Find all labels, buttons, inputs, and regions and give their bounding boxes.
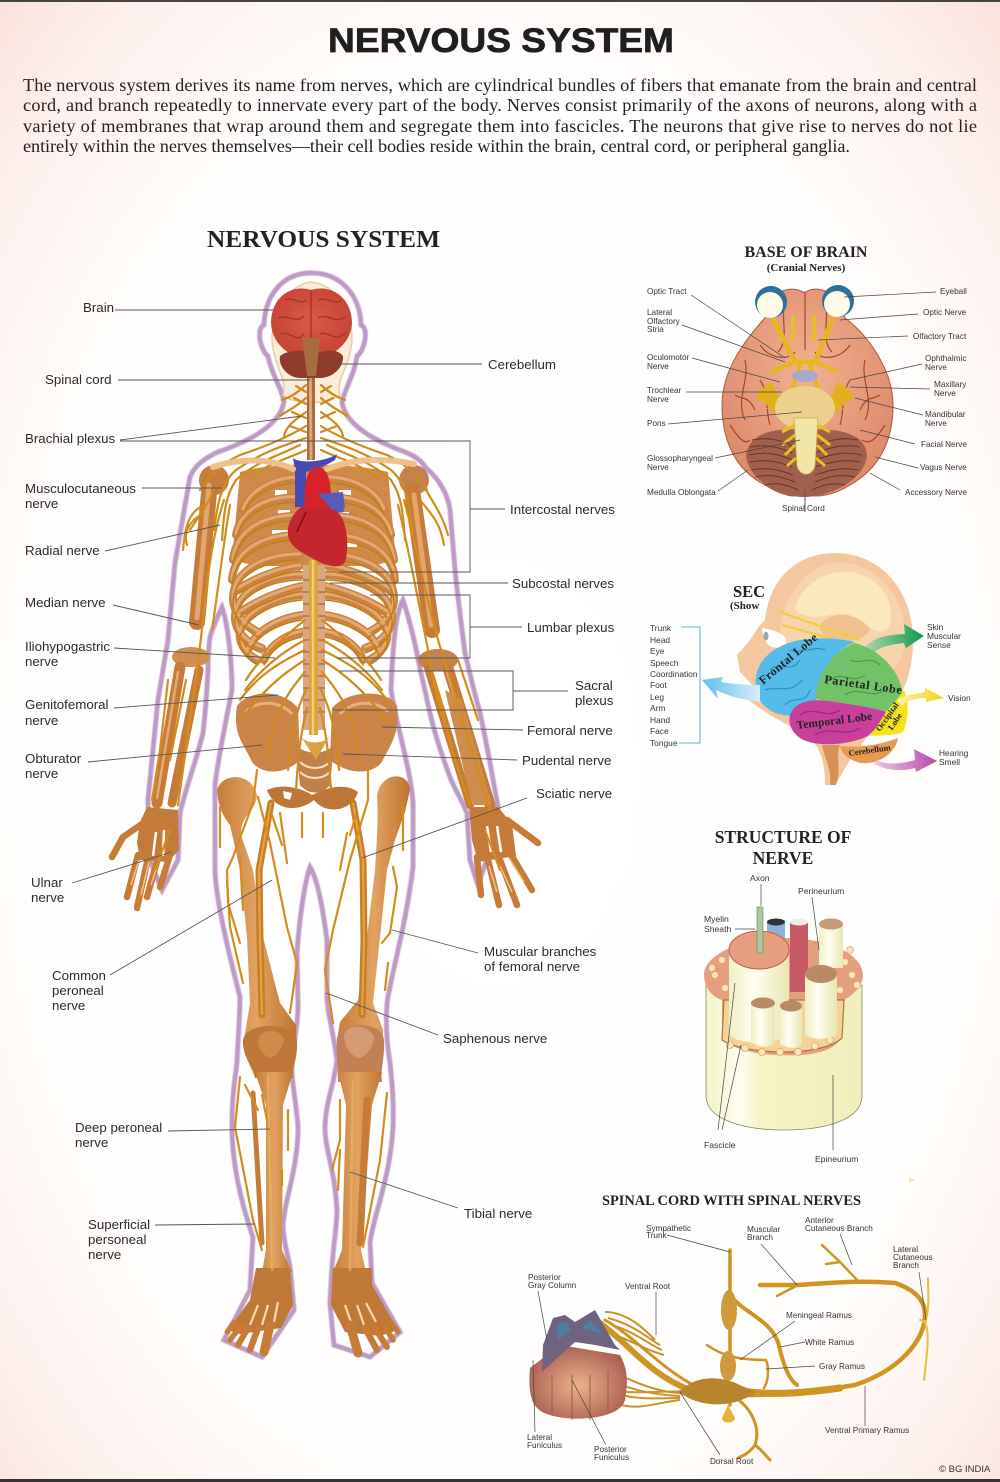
brain <box>271 288 352 378</box>
label: muscular branches of femoral nerve: of femoral nerve <box>484 959 580 974</box>
nerve labels: Fascicle <box>704 1140 736 1150</box>
thigh bones <box>217 776 410 1040</box>
labels: right side of brain: Olfactory Tract <box>913 332 967 341</box>
body labels: left column <box>25 300 470 1262</box>
labels: right side of brain: Facial Nerve <box>921 440 967 449</box>
spinal labels: Sympathetic <box>646 1224 691 1233</box>
label: radial nerve: Radial nerve <box>25 543 100 558</box>
illustration: nerve branches <box>529 1245 928 1460</box>
small marker <box>909 1178 916 1182</box>
labels: right side of brain <box>818 287 967 497</box>
partially hidden heading <box>730 582 765 612</box>
hands <box>112 807 538 908</box>
label: brain: Brain <box>83 300 114 315</box>
label: common peroneal nerve: peroneal <box>52 983 104 998</box>
labels: left side of brain: Oculomotor <box>647 353 690 362</box>
label: pudental nerve: Pudental nerve <box>522 753 611 768</box>
label: obturator nerve: nerve <box>25 766 58 781</box>
motor function list: Head <box>650 635 670 645</box>
intro paragraph: variety of membranes that wrap around them and segregate them into fascicles. The neurons that give rise to nerves do not lie <box>23 116 977 136</box>
label: muscular branches of femoral nerve: Muscular branches <box>484 944 597 959</box>
fascicle dots <box>708 946 860 1056</box>
motor function list: Leg <box>650 692 664 702</box>
motor function list: Eye <box>650 646 665 656</box>
label: sciatic nerve: Sciatic nerve <box>536 786 612 801</box>
illustration: nerve cross section <box>704 907 863 1130</box>
sense labels: Muscular <box>927 631 961 641</box>
parietal lobe <box>815 643 903 712</box>
arrow: green to skin and muscular sense <box>860 624 924 660</box>
label: sacral plexus <box>333 671 614 710</box>
label: superficial personeal nerve: personeal <box>88 1232 146 1247</box>
label: tibial nerve <box>350 1172 532 1221</box>
motor function list: Tongue <box>650 738 678 748</box>
label: deep peroneal nerve: nerve <box>75 1135 108 1150</box>
motor function list: Arm <box>650 703 665 713</box>
arrow: blue from frontal lobe <box>702 677 760 702</box>
label: deep peroneal nerve <box>75 1120 270 1150</box>
intro paragraph: The nervous system derives its name from nerves, which are cylindrical bundles of fibers that emanate from the brain and central <box>23 75 977 95</box>
label: iliohypogastric nerve: nerve <box>25 654 58 669</box>
small fascicles <box>819 924 843 968</box>
label: deep peroneal nerve: Deep peroneal <box>75 1120 162 1135</box>
nerve labels: Epineurium <box>815 1154 858 1164</box>
label: median nerve: Median nerve <box>25 595 106 610</box>
subheading: cranial nerves: (Cranial Nerves) <box>767 262 846 274</box>
nerve labels: Myelin <box>704 914 729 924</box>
cerebellum label: Cerebellum <box>848 742 891 758</box>
feet <box>227 1268 398 1353</box>
spinal cord <box>300 338 330 760</box>
ganglia <box>721 1290 737 1330</box>
occipital lobe label: Lobe <box>885 711 904 732</box>
heading: spinal cord with spinal nerves: SPINAL CORD WITH SPINAL NERVES <box>602 1193 861 1209</box>
panel: sectional brain lobes <box>650 553 971 785</box>
label: femoral nerve <box>382 723 613 738</box>
labels: left side of brain: Optic Tract <box>647 287 687 296</box>
label: sacral plexus: Sacral <box>575 678 613 693</box>
nerve labels <box>704 873 858 1164</box>
label: spinal cord: Spinal cord <box>45 372 112 387</box>
labels: right side of brain: Accessory Nerve <box>905 488 967 497</box>
labels: left side of brain <box>647 287 825 513</box>
label: subcostal nerves: Subcostal nerves <box>512 576 614 591</box>
label: muscular branches of femoral nerve <box>392 930 597 974</box>
motor function list: Trunk <box>650 623 672 633</box>
sense labels: Skin <box>927 622 944 632</box>
panel: structure of nerve <box>704 827 863 1164</box>
blue and red vessels <box>767 922 785 970</box>
labels: left side of brain: Spinal Cord <box>782 504 825 513</box>
spinal labels: Lateral <box>893 1245 918 1254</box>
label: common peroneal nerve: Common <box>52 968 106 983</box>
label: genitofemoral nerve <box>25 695 278 728</box>
torso chest fill <box>232 464 396 566</box>
ribs <box>232 477 395 665</box>
motor function list: Hand <box>650 715 670 725</box>
label: intercostal nerves: Intercostal nerves <box>510 502 615 517</box>
motor function list <box>650 623 698 748</box>
label: musculocutaneous nerve: nerve <box>25 496 58 511</box>
spinal labels: Gray Ramus <box>819 1362 865 1371</box>
panel: base of brain <box>647 244 967 513</box>
partially hidden heading: SEC <box>733 582 765 601</box>
body labels: right column <box>325 357 615 1221</box>
motor function list: Foot <box>650 680 667 690</box>
cerebellum <box>840 738 898 763</box>
copyright: © BG INDIA <box>939 1464 991 1475</box>
label: lumbar plexus <box>337 595 615 658</box>
label: saphenous nerve: Saphenous nerve <box>443 1031 547 1046</box>
labels: left side of brain: Nerve <box>647 395 669 404</box>
clavicles <box>213 460 414 469</box>
labels: right side of brain: Vagus Nerve <box>920 463 967 472</box>
spinal cord segment <box>529 1345 627 1419</box>
main title: NERVOUS SYSTEM <box>328 22 674 60</box>
nerve labels: Sheath <box>704 924 731 934</box>
label: superficial personeal nerve: nerve <box>88 1247 121 1262</box>
labels: left side of brain: Nerve <box>647 463 669 472</box>
labels: left side of brain: Trochlear <box>647 386 682 395</box>
label: ulnar nerve: Ulnar <box>31 875 63 890</box>
labels: right side of brain: Ophthalmic <box>925 354 966 363</box>
label: tibial nerve: Tibial nerve <box>464 1206 532 1221</box>
label: common peroneal nerve <box>52 880 272 1013</box>
labels: right side of brain: Nerve <box>925 363 947 372</box>
spinal labels: Anterior <box>805 1216 834 1225</box>
spinal labels: Funiculus <box>594 1453 629 1462</box>
spinal cord rootlets <box>605 1312 680 1407</box>
left and right forearm bones <box>157 667 490 805</box>
sense labels <box>927 622 971 767</box>
label: femoral nerve: Femoral nerve <box>527 723 613 738</box>
label: brachial plexus <box>25 416 470 572</box>
spinal labels: Posterior <box>528 1273 561 1282</box>
label: obturator nerve: Obturator <box>25 751 82 766</box>
occipital lobe <box>869 690 908 738</box>
labels: left side of brain: Lateral <box>647 308 672 317</box>
spinal labels: Meningeal Ramus <box>786 1311 852 1320</box>
heading: structure of nerve <box>715 827 851 868</box>
frontal lobe label: Frontal Lobe <box>756 630 821 687</box>
full body nervous system figure <box>112 273 538 1357</box>
intro paragraph <box>23 75 977 156</box>
label: common peroneal nerve: nerve <box>52 998 85 1013</box>
label: obturator nerve <box>25 745 262 781</box>
panel: spinal cord with spinal nerves <box>527 1193 933 1466</box>
labels: right side of brain: Optic Nerve <box>923 308 967 317</box>
labels: left side of brain: Medulla Oblongata <box>647 488 716 497</box>
temporal lobe <box>789 700 886 744</box>
cerebellum <box>280 351 343 378</box>
label: musculocutaneous nerve <box>25 481 222 511</box>
arrow: yellow to vision <box>897 688 944 706</box>
labels: left side of brain: Nerve <box>647 362 669 371</box>
label: lumbar plexus: Lumbar plexus <box>527 620 615 635</box>
heart <box>213 454 414 566</box>
arrow: purple to hearing and smell <box>874 749 937 772</box>
temporal lobe label: Temporal Lobe <box>796 711 873 732</box>
heading: nervous system figure: NERVOUS SYSTEM <box>207 227 440 253</box>
motor function list: Speech <box>650 658 679 668</box>
label: median nerve <box>25 595 199 625</box>
intro paragraph: entirely within the nerves themselves—their cell bodies reside within the brain, central cord, or peripheral ganglia. <box>23 136 850 156</box>
peripheral nerves <box>152 385 500 1270</box>
arm bones <box>157 465 492 805</box>
label: brachial plexus: Brachial plexus <box>25 431 116 446</box>
labels: right side of brain: Mandibular <box>925 410 966 419</box>
label: iliohypogastric nerve: Iliohypogastric <box>25 639 110 654</box>
spinal labels: Cutaneous Branch <box>805 1224 873 1233</box>
spinal labels: Muscular <box>747 1225 780 1234</box>
heading: structure of nerve: NERVE <box>753 848 813 868</box>
sense labels: Hearing <box>939 748 969 758</box>
brain stem <box>794 418 818 474</box>
sense labels: Vision <box>948 693 971 703</box>
label: superficial personeal nerve: Superficial <box>88 1217 150 1232</box>
spinal labels <box>527 1216 933 1466</box>
label: iliohypogastric nerve <box>25 639 275 669</box>
partially hidden heading: (Show <box>730 600 759 612</box>
cerebellum folds <box>746 429 867 497</box>
spinal labels: Ventral Root <box>625 1282 671 1291</box>
label: pudental nerve <box>343 753 611 768</box>
label: superficial personeal nerve <box>88 1217 255 1262</box>
heading: base of brain: BASE OF BRAIN <box>745 244 868 261</box>
parietal lobe label: Parietal Lobe <box>824 672 903 697</box>
motor function list: Face <box>650 726 669 736</box>
list bracket <box>679 627 700 743</box>
label: sacral plexus: plexus <box>575 693 614 708</box>
spinal labels: Cutaneous <box>893 1253 933 1262</box>
spinal labels: Dorsal Root <box>710 1457 754 1466</box>
spinal labels: Gray Column <box>528 1281 577 1290</box>
label: ulnar nerve <box>31 852 172 905</box>
illustration: underside of brain <box>722 285 893 512</box>
axon <box>757 907 763 953</box>
label: radial nerve <box>25 525 220 558</box>
spinal labels: Lateral <box>527 1433 552 1442</box>
spinal labels: Branch <box>747 1233 773 1242</box>
intro paragraph: cord, and branch repeatedly to innervate every part of the body. Nerves consist primarily of the axons of neurons, along with a <box>23 95 977 115</box>
label: cerebellum: Cerebellum <box>488 357 556 372</box>
label: genitofemoral nerve: nerve <box>25 713 58 728</box>
nerve labels: Perineurium <box>798 886 844 896</box>
label: musculocutaneous nerve: Musculocutaneous <box>25 481 136 496</box>
spinal labels: Ventral Primary Ramus <box>825 1426 909 1435</box>
illustration: head in profile <box>737 553 913 785</box>
nerve labels: Axon <box>750 873 770 883</box>
labels: left side of brain: Stria <box>647 325 664 334</box>
labels: right side of brain: Nerve <box>934 389 956 398</box>
sense labels: Smell <box>939 757 960 767</box>
spinal labels: White Ramus <box>805 1338 854 1347</box>
spinal labels: Posterior <box>594 1445 627 1454</box>
occipital lobe label: Occipital <box>873 700 901 733</box>
spinal labels: Funiculus <box>527 1441 562 1450</box>
pelvis <box>236 694 398 809</box>
spinal labels: Trunk <box>646 1231 668 1240</box>
labels: left side of brain: Pons <box>647 419 666 428</box>
label: saphenous nerve <box>326 993 547 1046</box>
frontal lobe <box>756 630 855 716</box>
motor function list: Coordination <box>650 669 698 679</box>
body silhouette halo <box>148 273 498 1357</box>
cranial nerves <box>773 318 833 362</box>
labels: right side of brain: Maxillary <box>934 380 967 389</box>
heading: structure of nerve: STRUCTURE OF <box>715 827 851 847</box>
sense labels: Sense <box>927 640 951 650</box>
label: genitofemoral nerve: Genitofemoral <box>25 697 109 712</box>
labels: left side of brain: Glossopharyngeal <box>647 454 713 463</box>
labels: left side of brain: Olfactory <box>647 317 681 326</box>
vertebral column <box>303 565 325 730</box>
labels: right side of brain: Nerve <box>925 419 947 428</box>
knees and shins <box>243 1025 384 1272</box>
label: ulnar nerve: nerve <box>31 890 64 905</box>
labels: right side of brain: Eyeball <box>940 287 967 296</box>
spinal labels: Branch <box>893 1261 919 1270</box>
eyeballs <box>755 286 787 318</box>
label: sciatic nerve <box>362 786 612 858</box>
